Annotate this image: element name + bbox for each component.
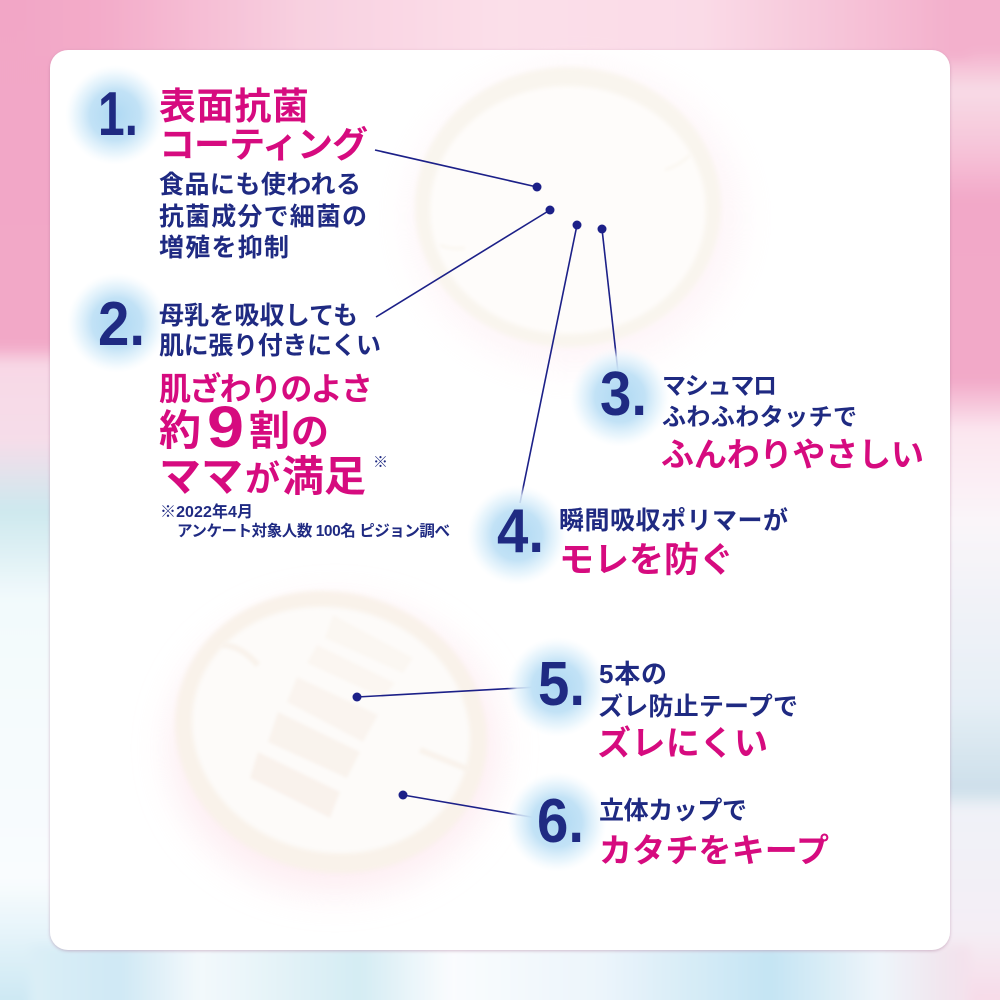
item 5	[507, 637, 798, 763]
pad illustration: top	[410, 67, 740, 368]
text 1: 抗菌成分で細菌の	[159, 203, 367, 231]
heading 3: ふんわりやさしい	[661, 436, 924, 473]
number 6	[507, 772, 607, 872]
heading 2: ※	[373, 454, 388, 471]
number 6: 6.	[537, 787, 584, 856]
text 5	[598, 659, 798, 721]
heading 1: コーティング	[159, 124, 368, 165]
heading 6: カタチをキープ	[599, 832, 829, 869]
text 3: マシュマロ	[662, 373, 777, 400]
heading 2: 9	[207, 395, 244, 460]
number 1: 1.	[98, 80, 138, 149]
number 2	[67, 273, 167, 373]
heading 4: モレを防ぐ	[559, 541, 734, 580]
text 1: 食品にも使われる	[159, 171, 361, 199]
text 1: 増殖を抑制	[159, 234, 289, 262]
heading 5: ズレにくい	[597, 724, 768, 763]
item 4	[467, 485, 788, 585]
item 2	[67, 273, 450, 540]
number 4: 4.	[497, 497, 544, 566]
footnote: ※2022年4月	[160, 502, 253, 521]
text 2: 母乳を吸収しても	[159, 302, 358, 330]
heading 2: 満足	[282, 453, 366, 500]
heading 2: 約	[159, 407, 201, 454]
number 3	[570, 347, 670, 447]
footnote: アンケート対象人数 100名 ピジョン調べ	[177, 521, 450, 540]
text 5: 5本の	[599, 659, 667, 689]
item 1	[65, 65, 368, 262]
text 1	[159, 171, 367, 262]
heading 2: 肌ざわりのよさ	[159, 371, 373, 407]
text 4: 瞬間吸収ポリマーが	[559, 506, 788, 535]
heading 2: ママ	[159, 453, 243, 500]
number 5	[507, 637, 607, 737]
heading 2	[159, 371, 388, 500]
leader lines with dots	[352, 150, 618, 818]
item 6	[507, 772, 829, 872]
heading 2: の	[291, 412, 329, 454]
pad illustration: bottom	[143, 556, 519, 908]
heading 1: 表面抗菌	[159, 86, 309, 127]
number 1	[65, 65, 165, 165]
text 3	[662, 373, 857, 431]
heading 2: 割	[249, 408, 290, 454]
text 3: ふわふわタッチで	[662, 404, 857, 431]
number 2: 2.	[98, 290, 145, 359]
footnote	[160, 502, 450, 540]
number 4	[467, 485, 567, 585]
text 5: ズレ防止テープで	[598, 692, 798, 721]
number 3: 3.	[600, 360, 647, 429]
text 2: 肌に張り付きにくい	[159, 332, 381, 360]
number 5: 5.	[538, 650, 585, 719]
item 3	[570, 347, 924, 473]
heading 2: が	[245, 460, 280, 499]
text 2	[159, 302, 381, 360]
text 6: 立体カップで	[599, 797, 747, 825]
heading 1	[159, 86, 368, 165]
